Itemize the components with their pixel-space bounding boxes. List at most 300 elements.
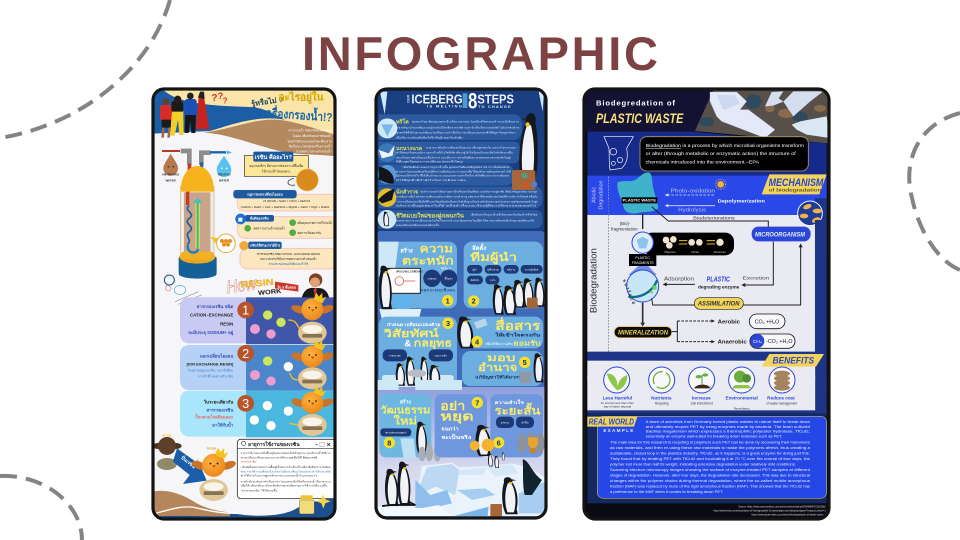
step 4: communicate: ยอมรับ	[513, 340, 541, 348]
step 2: build team	[464, 242, 545, 315]
row 4: explorer: นักสำรวจออกไปค้นหาภูเขาน้ำแข็งแห่งใหม่ที่เหมาะสมกับการอยู่อาศัย เพื่อนำข้อมูลกลับมาบอกฝูง	[420, 188, 537, 193]
example text: fraction (MAF) was replaced by more of the rigid amorphous fraction (RAF). This showed that the TfCut2 has	[610, 484, 810, 488]
example text: sustainable, closed loop in the plastics industry. TfCut2, as it happens, is a great enzyme for doing just this.	[610, 452, 810, 456]
step 2	[180, 340, 336, 391]
textured band	[587, 352, 827, 361]
step 3: vision and strategy: &	[404, 339, 411, 349]
callout: what is resin	[244, 152, 308, 176]
sources	[713, 505, 826, 517]
step 2: [ION EXCHANGE RESIN]	[187, 361, 234, 366]
title: iceberg 8 steps: 8	[468, 88, 477, 113]
row 4: explorer	[378, 187, 543, 208]
heading: how resin work: RESIN	[240, 277, 274, 290]
row 2: seagull	[378, 142, 520, 164]
arrow: regenerate resin	[173, 448, 207, 484]
step 2: จากน้ำที่ไหลผ่านตัวเรซิน	[198, 373, 234, 378]
enzyme label: degrading enzyme	[698, 284, 740, 289]
step 1: create urgency: ตระหนัก	[402, 254, 454, 267]
phone frame	[153, 89, 335, 519]
row 5: new life: ชีวิตแบบใหม่ของฝูงเพนกวิน	[396, 212, 464, 221]
row 1: story: ทุกคนใช้ชีวิตไปตามปกติและไม่เห็นความจำเป็นในการเปลี่ยนแปลงเลย ทั้งที่ปัญหาใหญ่กำลังมา	[396, 129, 517, 135]
step 5: empower: มอบ	[487, 353, 515, 364]
step 7: don't stop: อย่า	[440, 399, 465, 413]
icon: untreated water drop	[162, 154, 179, 182]
section: definition band	[587, 132, 827, 176]
example text: Scanning electron microscopy images showing the surface of enzyme-treated PET samples at different	[610, 468, 810, 472]
callout: what is resin: เรซิน คืออะไร?	[255, 153, 292, 161]
assimilation path: ASSIMILATION	[697, 301, 740, 307]
row 4: explorer: การเดินทางเต็มไปด้วยความเสี่ยงและต้องอาศัยความกล้าหาญ แต่พวกเขาก็ค้นพบดินแดนใหม่ที่ดีกว่าเดิม ทำให้ทุกตัวเชื่อมั่น	[396, 194, 538, 200]
sources: https://www.fetico.com/importance-of-biodegradable-10-advantages-and-disadvantages/?expand_article=1	[713, 509, 826, 512]
step 1: create urgency: ความ	[420, 243, 453, 255]
step 2: แลกเปลี่ยนไอออน	[200, 352, 233, 358]
card: benefits	[235, 214, 337, 238]
row 5: new life: พวกเขาพบว่าการเปลี่ยนแปลงไม่ใช่เรื่องน่ากลัว และวัฒนธรรมใหม่นี้ทำให้พวกเขาพร้อมรับมือกับอนาคตที่จะมาถึง	[396, 218, 534, 222]
example text: The main idea for this research is recycling of polymers such PET can be done by recovering their monomers	[610, 441, 810, 445]
title: iceberg 8 steps: TO CHANGE	[478, 104, 511, 109]
step 3: vision and strategy: 3	[446, 319, 450, 328]
enzyme label	[698, 275, 740, 289]
benefit: less harmful: Less Harmful	[603, 395, 632, 400]
section: header with people	[153, 88, 337, 305]
heading: 8 steps to change	[378, 231, 543, 232]
mineralization pill	[614, 327, 672, 338]
section: abiotic degradation band: Abiotic	[592, 187, 598, 203]
step 2: build team: จัดตั้ง	[472, 242, 486, 252]
card: how to use: ส่วนประกอบของน้ำดื่มและน้ำใช้	[269, 261, 308, 266]
icon: sun	[716, 179, 726, 189]
window: resin lifetime: อายุการใช้งานของเรซิน	[248, 441, 300, 448]
section: header and story rows	[378, 92, 544, 232]
biodeteriorations arrow: Biodeteriorations	[693, 215, 736, 220]
icon: recharged resin bird: RESIN	[207, 446, 216, 450]
step 1: create urgency: ให้เห็นว่า	[440, 265, 452, 271]
intro text: ไอออน เพื่อปรับคุณภาพของน้ำ	[291, 133, 332, 139]
icon: dark penguin right	[523, 459, 542, 495]
heading: mechanism	[762, 174, 827, 194]
title: iceberg 8 steps: STEPS	[477, 92, 514, 107]
heading: benefits: BENEFITS	[772, 355, 815, 365]
step 3: vision and strategy: กำหนด เปลี่ยนแปลงด้วย	[387, 321, 440, 327]
biodeteriorations arrow	[652, 207, 768, 228]
icon: plastic fragments: FRAGMENTS	[632, 261, 654, 265]
row 2: seagull: เพนกวินหลายตัวเริ่มมองเห็นโอกาส และเห็นว่าการย้ายถิ่นคือทางรอดของพวกเขาทุกตัวในฝูง	[396, 154, 511, 160]
example text: and ultimately recycle PET by using enzymes made by bacteria. The team cultured	[646, 425, 810, 429]
mineralization pill: MINERALIZATION	[618, 330, 669, 336]
title: iceberg 8 steps: OUR	[406, 95, 410, 103]
window: resin lifetime: − ▢ ✕	[315, 441, 331, 448]
heading	[252, 91, 332, 122]
row 5: new life: เมื่อเดินทางถึงภูเขาน้ำแข็งใหม่ เพนกวินเริ่มสร้างชีวิตใหม่	[471, 212, 538, 217]
heading: benefits	[762, 354, 824, 367]
step 3: ในระยะเดียวกัน	[204, 398, 233, 404]
step 1: จะมีประจุ SODIUM+ อยู่	[188, 329, 234, 336]
icon: penguin with suitcase bottom right	[490, 477, 518, 517]
step 1: create urgency: 1	[446, 296, 450, 305]
section: header	[583, 88, 830, 143]
label: biodegradation: Biodegradation	[589, 248, 599, 313]
row 1: story: ทริโค	[396, 118, 409, 126]
intro text: ซึ่งเป็นประโยชน์ต่อเครื่องกรองน้ำ	[289, 143, 332, 149]
heading: how resin work: ใน 3 ขั้นตอน	[277, 283, 297, 289]
benefit: nutrients: Recycling	[655, 401, 669, 405]
icon: plastic outline	[604, 137, 633, 170]
adsorption arrow	[663, 276, 695, 286]
window: resin lifetime: การล้างย้อนเรซินควรทำเป็นประจำ โดยเฉพาะเมื่อใช้เครื่องกรองน้ำเป็นเวลานาน	[241, 478, 331, 483]
monomers pill	[643, 233, 734, 255]
icon: recharged resin bird	[190, 446, 237, 501]
step 7: don't stop: จนกว่า	[441, 426, 459, 433]
row 3: orca: เมื่อเริ่มเดินทางออกจากภูเขาน้ำแข็ง ฝูงเพนกวินต้องเผชิญอันตรายจากวาฬเพชฌฆาต	[403, 164, 510, 169]
row 2: seagull: นกนางนวล	[396, 146, 422, 152]
heading: how resin work	[228, 278, 298, 295]
heading: real world example: REAL WORLD	[589, 417, 634, 426]
step 8: new culture: วัฒนธรรม	[380, 404, 430, 416]
panel: resin water filter infographic	[150, 85, 340, 525]
step 6: short-term wins: ตัวชี้วัด	[521, 420, 529, 424]
window: resin lifetime: อายุการใช้งานของเรซินขึ้นอยู่กับคุณภาพของน้ำที่เข้าสู่ระบบ และปริมาณน้ำที่ใช้งาน	[241, 451, 331, 456]
icon: untreated water drop: WATER	[166, 178, 176, 182]
heading: รู้หรือไม่ ?	[251, 95, 284, 109]
icon: plastic fragments: PLASTIC	[635, 256, 650, 260]
row 1: story: เมื่อถึงเวลาต้องตัดสินใจจึงเริ่มมีเพนกวินรับฟัง	[396, 135, 463, 139]
heading: how resin work: How	[225, 273, 258, 297]
example text: changes within the polymer chains during thermal degradation, where the so-called mobile amorphous	[610, 479, 810, 483]
step 3	[180, 386, 336, 437]
step 3: vision and strategy	[379, 317, 457, 388]
step 5: empower	[462, 351, 543, 386]
card: how to use: สารกรองเรซิน ชนิด CATION - EXCHANGE RESIN	[257, 252, 320, 256]
heading: how resin work: WORK	[258, 288, 282, 297]
step 4: communicate: 4	[475, 337, 480, 346]
bottom wave decoration	[154, 490, 230, 516]
section: steps area background	[378, 232, 544, 387]
example text: polymer lost more than half its weight, indicating extensive degradation under relatively mild conditions.	[610, 463, 796, 467]
benefit: less harmful: for environment than other	[601, 401, 634, 405]
step 3: ก็จะคายโซเดียมออก	[195, 413, 234, 420]
step 1: create urgency: สร้าง	[400, 246, 413, 254]
step 2: build team: 2	[472, 297, 476, 306]
monomers pill: Dimer	[692, 250, 699, 254]
row 2: seagull: ทำให้เพนกวินตระหนักว่าภูเขาน้ำแข็งไม่ใช่ที่เดียวที่จะอยู่ได้ จึงเริ่มสนใจและเปิดใจรับฟังมากขึ้น	[396, 150, 513, 155]
heading: อะไรอยู่ใน	[278, 90, 324, 104]
panel: biodegradation of plastic waste	[580, 85, 835, 525]
anaerobic products: -CO₂ +H₂O	[766, 339, 793, 345]
question marks: ?	[211, 93, 217, 104]
window: resin lifetime: “สารกรองเรซิน” ใช้ได้นานขึ้น	[241, 488, 278, 492]
window: resin lifetime: เพื่อให้เรซินกลับมามีประสิทธิภาพและยืดอายุการใช้งานได้นานขึ้น	[241, 484, 328, 489]
fragmentation label	[611, 221, 638, 232]
icon: plastic surface: surface	[621, 278, 636, 306]
icon: treated water drop	[217, 156, 231, 182]
example text: as raw materials, and then re-using these raw materials to make the polymers afresh, thus creating a	[610, 446, 810, 450]
step 6: short-term wins: รูปธรรม	[501, 420, 510, 424]
benefit: environmental: Remediation	[734, 407, 750, 411]
card: chemical reactions: CaSO4 + Na2X = CaX + Na2SO4 + MgCl2 + Na2X = MgX + 2NaCl	[241, 205, 330, 209]
title: iceberg 8 steps: IS MELTING	[427, 104, 462, 109]
benefit: nutrients: Nutrients	[651, 395, 672, 400]
step 6: short-term wins	[490, 394, 545, 457]
aerobic and anaerobic branches: Anaerobic	[718, 340, 747, 346]
section: header: Biodegredation of	[596, 99, 675, 108]
benefit: reduce cost: Reduce cost	[767, 396, 795, 401]
hydrolysis arrow	[665, 204, 715, 214]
fragmentation label: (Bio)-	[620, 221, 631, 226]
step 1: create urgency: ชี้ปัญหา	[444, 276, 453, 280]
benefit: increase: Increase	[692, 395, 711, 400]
definition box: chemicals introduced into the environment.–EPA	[646, 159, 760, 164]
title: iceberg 8 steps: ICEBERG	[411, 92, 463, 107]
excretion arrow	[741, 242, 773, 287]
heading: real world example	[587, 417, 637, 433]
enzyme label: PLASTIC	[707, 275, 731, 284]
example text: a preference to the MAF when it comes to breaking down PET.	[610, 490, 724, 494]
icon: plastic surface	[621, 270, 659, 306]
row 3: orca	[378, 164, 514, 186]
step 3: vision and strategy: วิสัยทัศน์	[383, 327, 440, 340]
step 2: build team: พลังงาน	[507, 267, 515, 271]
icon: resin beads photo	[288, 169, 318, 191]
card: chemical reactions	[233, 190, 337, 211]
step 7: don't stop: หยุด	[440, 410, 474, 425]
aerobic and anaerobic branches: Aerobic	[718, 320, 740, 326]
anaerobic products	[750, 334, 795, 348]
card: chemical reactions: 2X (RCO3) + Na2X = 2 RCX + Na2CO3	[263, 199, 311, 203]
window: resin lifetime: “สารกรองเรซิน”	[241, 460, 257, 464]
row 2: seagull: นกนางนวลบินสำรวจดินแดนใหม่และมาเยือนฝูงเพนกวิน บอกเล่าโลกภายนอก	[426, 146, 517, 150]
sources: Source: https://www.sciencedirect.com/science/article/abs/pii/S0048969721010562	[738, 505, 826, 508]
section: three resin steps	[152, 293, 337, 523]
icon: resin beads callout	[210, 234, 235, 253]
section: benefits	[587, 367, 827, 414]
aerobic products: CO₂ +H₂O	[755, 320, 779, 326]
row 3: orca: ผู้นำคอยให้กำลังใจ ชี้ให้เห็นเป้าหมาย และฉลองความสำเร็จเล็กๆ ที่เกิดขึ้นระหว่างการเดินทาง	[396, 173, 509, 179]
benefit: nutrients	[649, 367, 675, 405]
section: header with people: ?	[223, 96, 228, 105]
row 3: orca: พวกเขาไม่ยอมแพ้แต่เรียนรู้ที่จะร่วมมือกันและวางแผน เพื่อให้ทุกตัวผ่านพ้นอุปสรรคไปได้	[396, 169, 512, 174]
callout: what is resin: ใช้กรองน้ำโดยเฉพาะ	[262, 168, 291, 173]
benefit: less harmful: way of waste disposal	[604, 405, 631, 409]
intro text: สารกรองน้ำ ชนิดเรซินแลกเปลี่ยน	[289, 127, 332, 132]
row 4: explorer: ว่าการเปลี่ยนแปลงเป็นสิ่งที่ดี และเริ่มเตรียมตัวเดินทางไปยังถิ่นฐานใหม่ร่วมกันด้วยความหวังและความพร้อมของทุกตัวในฝูง	[396, 198, 538, 204]
benefit: environmental	[725, 367, 758, 411]
row 5: new life	[378, 210, 543, 229]
step 8: new culture: ให้การเปลี่ยนแปลงอยู่ต่อไป	[385, 430, 407, 434]
step 4: communicate: ให้เข้าใจตรงกัน	[495, 331, 540, 337]
icon: plastic waste bag: PLASTIC WASTE	[623, 199, 656, 203]
anaerobic products: CH₄	[753, 339, 762, 345]
card: chemical reactions: กฎการแลกเปลี่ยนไอออน	[247, 192, 283, 198]
row 1: story: ฝูงเพนกวินอาศัยอยู่บนภูเขาน้ำแข็งมาหลายรุ่น วันหนึ่งเฟร็ดพบรอยร้าวและน้ำที่ละลาย	[412, 118, 519, 124]
definition box	[640, 137, 808, 171]
icon: treated water drop: WATER	[219, 178, 229, 182]
heading: real world example: EXAMPLE	[603, 428, 633, 433]
example text: A team of scientists from Germany turned plastic wastes to nature itself to break down	[646, 420, 810, 424]
section: abiotic degradation band: Degradation	[599, 180, 605, 210]
step 7: don't stop: 7	[475, 398, 479, 407]
row 1: story: จึงนำหลักฐานไปบอกเพื่อนๆ และผู้นำแต่ไม่มีใครเชื่อ พวกเขาคิดว่าภูเขาน้ำแข็งแข็งแรงปลอดภัยดี ไม่มีอะไรต้องกังวล	[395, 124, 520, 130]
step 1	[180, 293, 336, 344]
step 3: สารกรองเรซิน	[207, 407, 233, 412]
icon: exhausted resin bird: RESIN	[162, 434, 171, 438]
step 1: create urgency	[379, 242, 457, 320]
callout: what is resin: อนุภาคเล็กๆ ที่ผ่านการสังเคราะห์ขึ้นเพื่อ	[249, 162, 303, 169]
step 3: vision and strategy: ภาพอนาคต	[389, 353, 401, 357]
step 5: empower: 5	[523, 358, 527, 367]
decorative bubbles	[164, 275, 202, 304]
step 8: new culture: 8	[387, 438, 391, 447]
step 1: สารกรองเรซิน ชนิด	[197, 304, 234, 309]
step 2: build team: ทีมผู้นำ	[470, 251, 517, 265]
section: header with people: ?	[218, 91, 224, 101]
intro text	[287, 127, 332, 154]
step 6: short-term wins: ระยะสั้น	[495, 403, 541, 418]
photo: plastic waste	[695, 90, 830, 143]
window: resin lifetime: สามารถใช้งานได้ต่อเนื่องโดยไม่ต้องเปลี่ยนใหม่บ่อยๆ ทำให้ประหยัด	[241, 469, 331, 474]
heading: เครื่องกรองน้ำ!?	[261, 103, 333, 125]
step 8: new culture	[379, 394, 441, 462]
microorganism pill: MICROORGANISM	[755, 231, 806, 238]
icon: person with megaphone	[302, 273, 329, 298]
icon: treated water drop: TREATED	[217, 173, 231, 177]
icon: penguin with gold medals	[470, 425, 494, 456]
step 1: 1	[242, 304, 249, 318]
icon: microbe circle	[798, 201, 822, 226]
card: how to use: เรซินใช้ทำอะไรได้บ้าง	[250, 243, 281, 248]
microorganism pill	[752, 227, 811, 241]
example text: essentially an enzyme well-suited for breaking down materials such as PET.	[646, 435, 783, 439]
icon: penguin with suitcase	[512, 113, 538, 190]
step 8: new culture: สร้าง	[400, 398, 411, 405]
step 1: create urgency: UPS ICHALLS BREAKS!	[396, 270, 423, 273]
arrow: regenerate resin: ปั่นเรซิน	[180, 454, 198, 470]
icon: plastic fragments	[629, 232, 656, 266]
step 2: build team: ความสัมพันธ์	[525, 267, 539, 271]
card: benefits: ข้อดีของเรซิน	[250, 216, 270, 221]
row 3: orca: ทำให้ทุกตัวมีกำลังใจในการเดินทางต่อ	[396, 178, 467, 183]
section: bottom scene background	[376, 387, 546, 522]
step 3: 3	[242, 397, 249, 411]
photo-oxidation arrow	[665, 189, 715, 197]
icon: untreated water drop: UNTREATED	[162, 173, 179, 177]
icon: salt bottle and sparkles	[299, 494, 331, 514]
step 5: empower: อำนาจ	[478, 362, 517, 374]
aerobic and anaerobic branches	[672, 319, 747, 346]
benefit: environmental: Environmental	[725, 396, 758, 401]
step 8: new culture: ใหม่	[394, 414, 417, 428]
icon: water filter tank	[162, 150, 232, 279]
step 5: empower: แก้ปัญหาให้ได้มากที่สุด	[475, 373, 530, 380]
example text	[610, 420, 810, 494]
step 2: build team: ผู้นำ	[473, 268, 477, 271]
benefit: increase	[689, 367, 715, 405]
definition box: or alter (through metabolic or enzymatic action) the structure of	[646, 151, 796, 156]
assimilation path	[652, 243, 803, 309]
icon: plastic waste bag	[617, 172, 658, 214]
step 3: มาให้กับน้ำ	[212, 421, 234, 428]
heading: mechanism: MECHANISM	[769, 177, 824, 189]
sources: https://www.alcarecollect.com/article/biodegradation-of-plastic-waste	[751, 514, 824, 517]
excretion arrow: Excretion	[743, 275, 770, 281]
icon: small penguins	[488, 452, 505, 468]
section: steps 1 to 5	[379, 242, 545, 388]
row 4: explorer: หลังจากนั้นฝูงเพนกวินก็ย้ายถิ่นสำเร็จและเรียนรู้ที่จะเปลี่ยนแปลงตลอดไป	[396, 203, 537, 208]
heading: 8 steps to change: 8 STEPS TO CHANGE	[429, 234, 491, 239]
title: INFOGRAPHIC	[302, 27, 658, 80]
card: benefits: เพิ่มคุณภาพการบริโภคน้ำ	[297, 220, 333, 226]
step 6: short-term wins: ความสำเร็จ	[495, 398, 525, 405]
step 2: build team: ผู้เชี่ยวชาญ	[487, 267, 499, 271]
window: resin lifetime: เรซินที่เสื่อมสภาพสามารถฟื้นฟูได้โดยการล้างด้วยน้ำเกลือ เพื่อคืนประจุโซเดียม	[241, 465, 331, 470]
benefit: less harmful	[601, 367, 634, 409]
icebergs	[372, 380, 549, 522]
benefit: reduce cost	[766, 367, 797, 405]
card: how to use	[239, 241, 337, 269]
step 2: 2	[242, 347, 249, 361]
step 7: don't stop	[435, 394, 487, 457]
depolymerization label: Depolymerization	[718, 198, 765, 204]
example text: They found that by treating PET with TfCut2 and incubating it at 70 °C over the course of four days, the	[610, 457, 810, 461]
monomers pill: Monomer	[714, 250, 726, 254]
step 1: create urgency: แสดงผล	[428, 276, 437, 280]
heading: mechanism: of biodegradation	[769, 188, 822, 194]
step 2: โดยธาตุอยู่บนเรซิน, แมกนีเซียม	[188, 367, 233, 373]
adsorption arrow: Adsorption	[664, 276, 694, 282]
intro text: ช่วยลดความกระด้างของน้ำ	[296, 149, 332, 154]
icon: exhausted resin bird	[152, 434, 182, 470]
benefit: reduce cost: of waste management	[766, 401, 797, 405]
section: abiotic degradation band	[587, 172, 827, 258]
step 1: create urgency: ผลกระทบเชิงลบ	[420, 288, 456, 293]
card: benefits: ลดการเกิดตะกรัน	[297, 231, 322, 235]
row 2: seagull: นี่คือจุดเริ่มของการเปลี่ยนแปลงครั้งใหญ่	[395, 159, 463, 164]
monomers pill: Oligomer	[664, 250, 676, 254]
card: how to use: เหมาะสำหรับใช้ในการลดความกระด้างของน้ำ	[260, 256, 317, 261]
section: header: PLASTIC WASTE	[596, 110, 684, 126]
window: resin lifetime: ค่าใช้จ่ายในการดูแลรักษาระบบกรองน้ำในระยะยาว	[241, 474, 318, 478]
step 1: CATION−EXCHANGE	[190, 313, 233, 318]
card: benefits: ลดความกระด้างของน้ำ	[253, 226, 285, 231]
phone frame	[376, 89, 546, 518]
section: steps 6 to 8 and iceberg scene	[372, 380, 549, 522]
step 4: communicate	[457, 317, 543, 348]
definition box: Biodegradation is a process by which microbial organisms transform	[646, 143, 804, 148]
intro text: โดยกำจัดไอออนของโลหะที่ละลาย	[287, 139, 332, 143]
step 2: build team: ตัดสินใจ	[471, 278, 480, 282]
example text: Bacillus megaterium which expresses a thermophilic polyester hydrolase, TfCut2,	[646, 430, 810, 434]
step 3: vision and strategy: กลยุทธ	[414, 339, 452, 351]
example text: stages of degradation. However, after four days, the degradation rate decreased. This was due to structural	[610, 473, 810, 477]
section: real world example	[587, 414, 827, 517]
title: iceberg 8 steps	[380, 92, 544, 114]
step 3: vision and strategy: แผนการเดิน	[434, 354, 447, 357]
section: biodegradation diagram	[587, 201, 822, 305]
step 1: RESIN	[220, 321, 233, 326]
photo-oxidation arrow: Photo-oxidation	[671, 189, 715, 195]
window: resin lifetime: ควรเปลี่ยนเรซินตามระยะเวลาที่กำหนดเพื่อให้ได้คุณภาพดี	[241, 455, 318, 460]
phone frame	[584, 89, 829, 519]
fragmentation label: fragmentation	[611, 227, 638, 232]
window: resin lifetime	[237, 439, 336, 499]
hydrolysis arrow: Hydrolysis	[678, 208, 706, 214]
icon: large penguins bottom left	[382, 462, 415, 506]
step 4: communicate: เพื่อให้ทีมงานเกิด	[485, 341, 513, 346]
icon: group of people	[160, 92, 209, 138]
panel: iceberg 8 steps infographic	[372, 85, 550, 525]
row 5: new life: และพร้อมเปลี่ยนแปลงอีกครั้ง	[396, 223, 439, 227]
step 4: communicate: สื่อสาร	[495, 317, 541, 333]
step 6: short-term wins: 6	[497, 438, 501, 447]
